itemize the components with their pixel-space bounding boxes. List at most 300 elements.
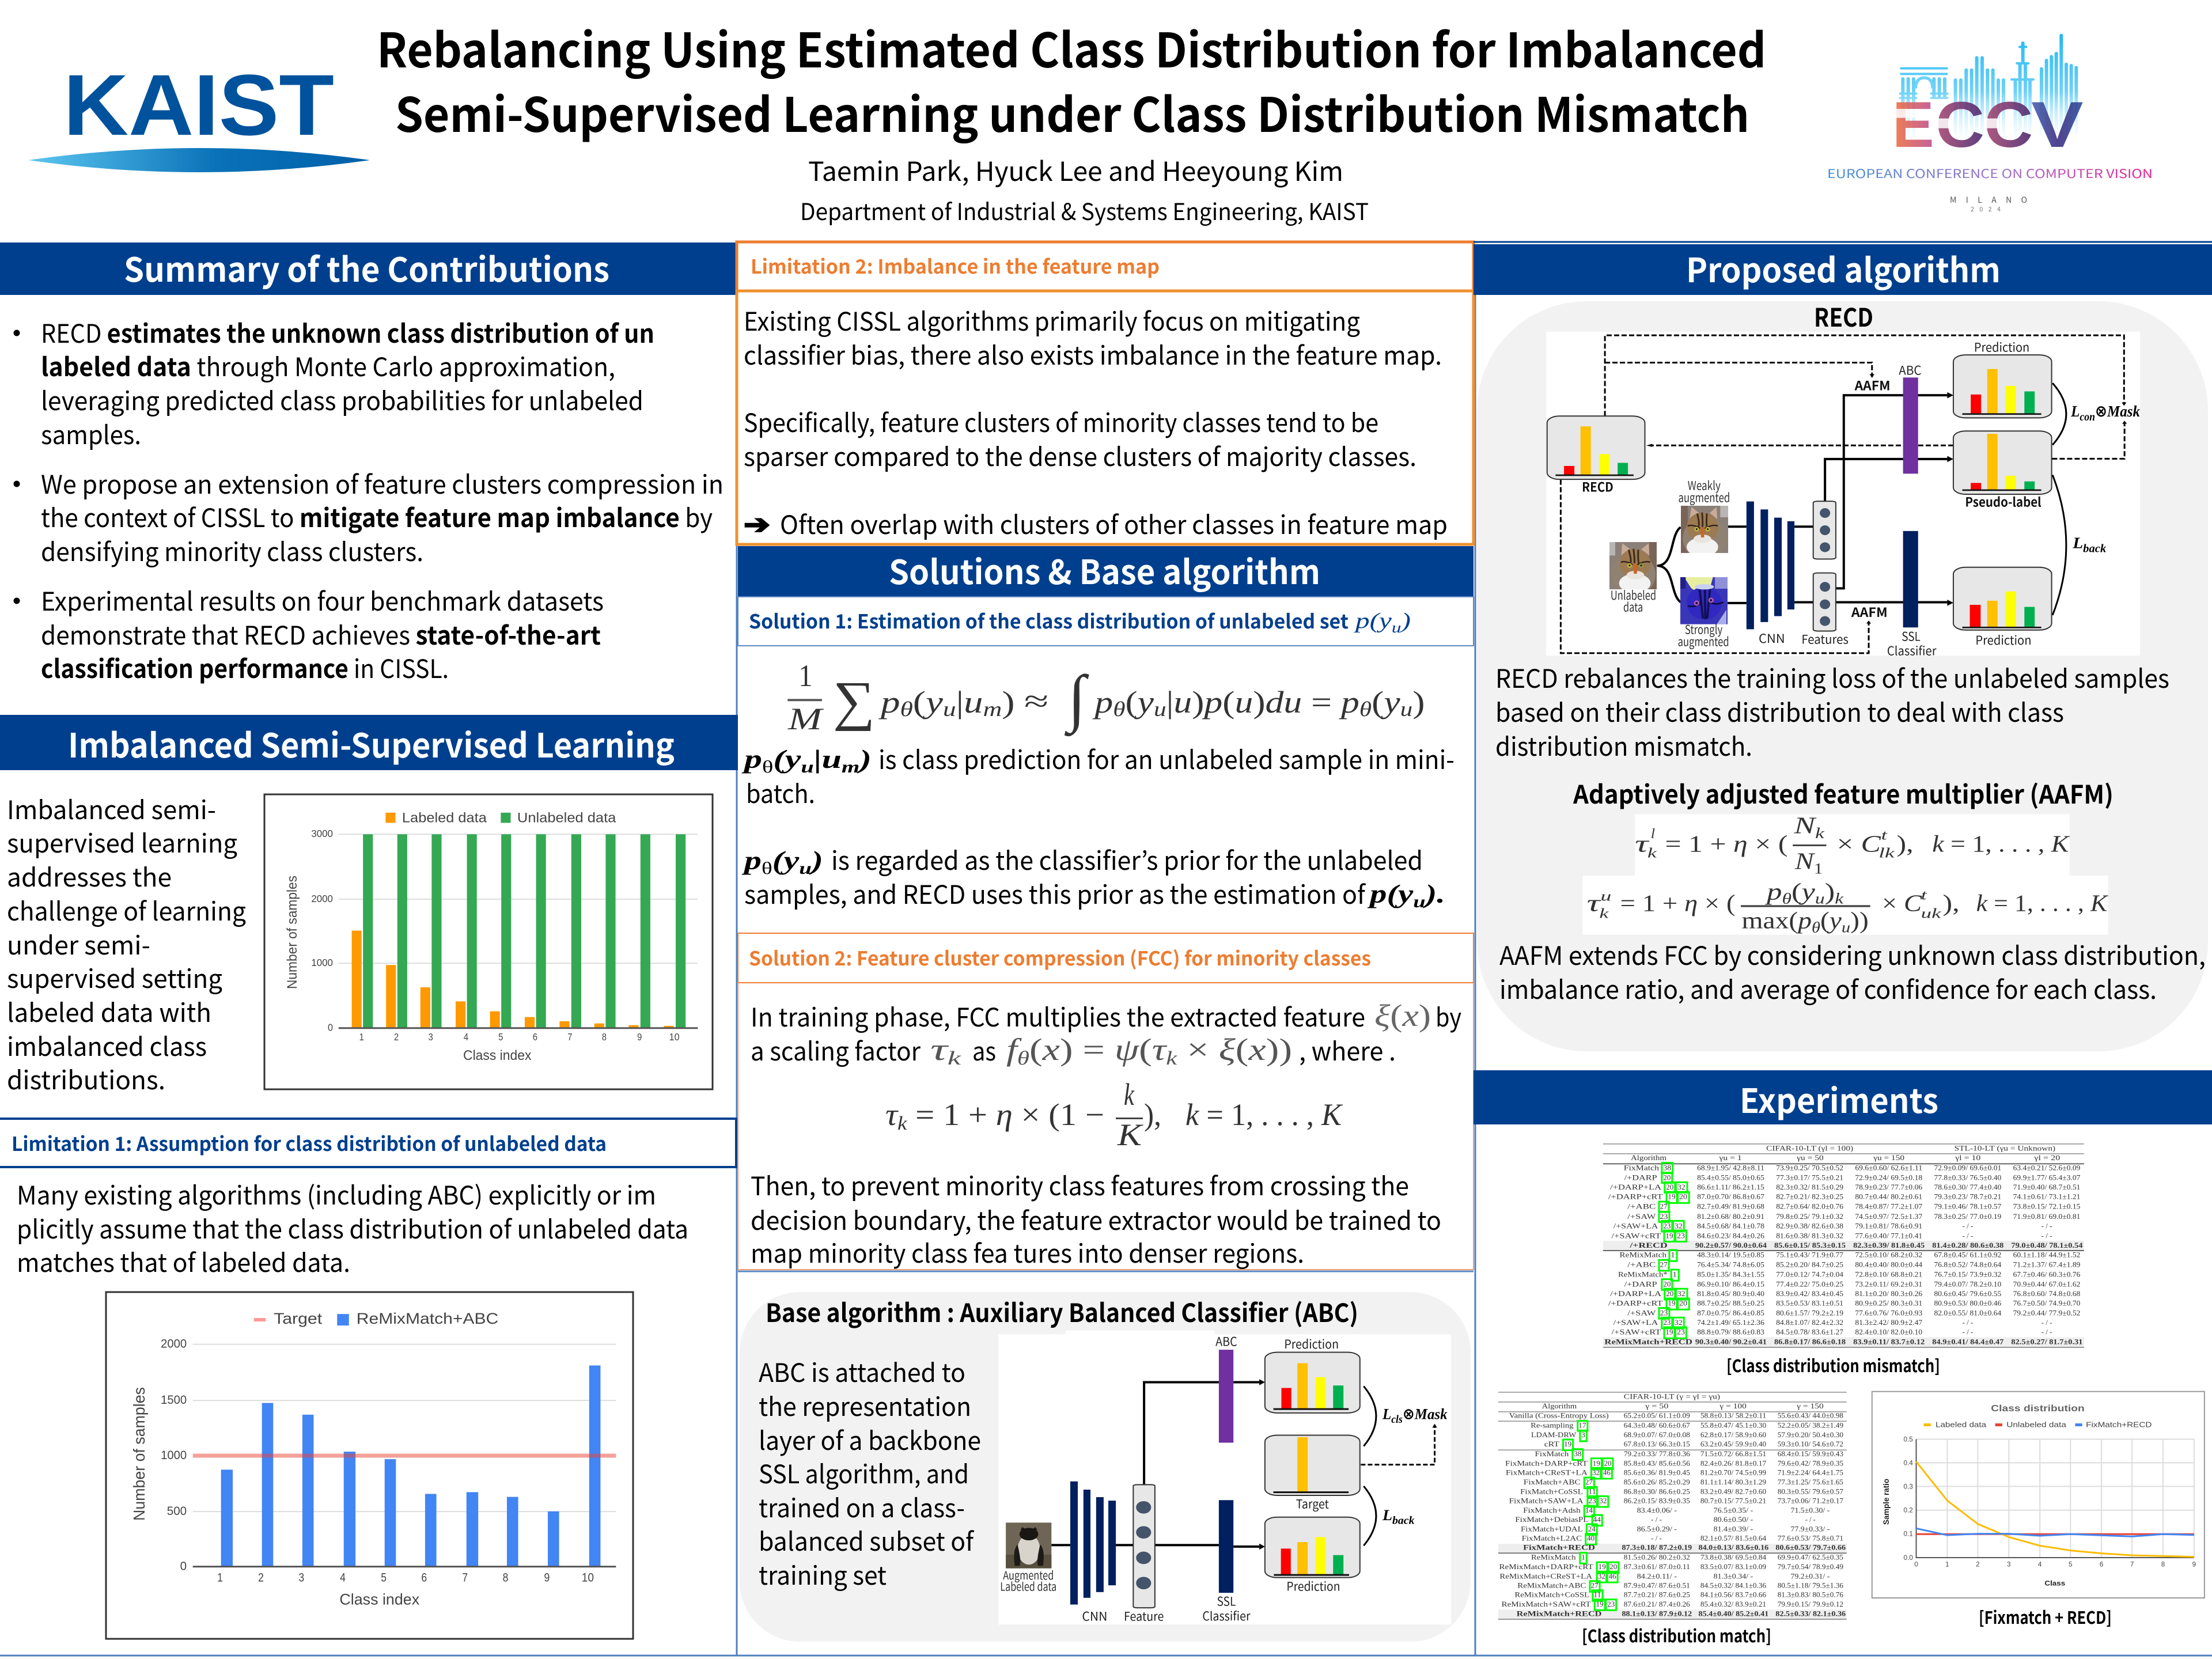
table: class distribution match: LDAM-DRW: [1531, 1431, 1576, 1439]
formula: AAFM multipliers: × C: [1882, 890, 1922, 916]
bar chart: labeled vs unlabeled samples per class: [264, 794, 713, 1089]
table: class distribution mismatch: ReMixMatch*: [1618, 1270, 1668, 1279]
table: class distribution mismatch: 84.8±1.07/ 82.4±2.32: [1776, 1319, 1843, 1327]
panel: experiments: 55.6±0.43/ 44.0±0.98: [1778, 1411, 1843, 1420]
line chart: class distribution: Labeled data: [1936, 1421, 1986, 1429]
table: class distribution mismatch: 77.4±0.22/ 75.0±0.25: [1776, 1280, 1843, 1289]
table: class distribution match: 44: [1593, 1516, 1601, 1524]
table: class distribution match: 83.5±0.07/ 83.1±0.09: [1700, 1563, 1766, 1571]
table: class distribution mismatch: 32: [1675, 1222, 1683, 1230]
SSL classifier: [1903, 531, 1918, 627]
text block: solution 2 explanation: decision boundary, the feature extractor would be trained to: [751, 1200, 1441, 1237]
heading: base algorithm: Base algorithm : Auxiliary Balanced Classifier (ABC): [766, 1293, 1358, 1330]
text block: ABC description: layer of a backbone: [759, 1421, 981, 1457]
table: class distribution mismatch: 19: [1665, 1328, 1673, 1336]
table: class distribution mismatch: - / -: [1963, 1328, 1973, 1336]
line chart: class distribution: 0.0: [1903, 1554, 1913, 1562]
panel: experiments: 80.6±0.53/ 79.7±0.66: [1775, 1543, 1846, 1552]
bar chart: ReMixMatch+ABC class distribution: Class index: [339, 1590, 419, 1608]
text block: solution 1 explanation: u: [801, 757, 814, 777]
formula: Monte Carlo approximation: u)p(u)du = p: [1173, 685, 1374, 719]
bar chart: labeled vs unlabeled samples per class: 1000: [311, 957, 333, 968]
table: class distribution match: 87.3±0.18/ 87.2±0.19: [1622, 1543, 1692, 1552]
table: class distribution match: CIFAR-10-LT (γ = γl = γu): [1624, 1392, 1720, 1401]
logo: ECCV: 2024: [1971, 204, 2001, 214]
table: class distribution mismatch: 20: [1679, 1192, 1687, 1201]
table: class distribution mismatch: 20: [1666, 1183, 1673, 1191]
formula: AAFM multipliers: max(p: [1742, 907, 1849, 934]
line chart: class distribution: 3: [2007, 1560, 2011, 1568]
formula: scaling factor tau: K: [1117, 1118, 1143, 1152]
table: class distribution match: 81.3±0.34/ -: [1714, 1572, 1753, 1581]
text block: first contribution: [14, 313, 654, 452]
bar chart: ReMixMatch+ABC class distribution: 1000: [161, 1448, 187, 1462]
panel: limitation 2: [737, 242, 1474, 544]
prediction box bottom: [1953, 567, 2052, 649]
formula: scaling factor tau: [885, 1077, 1343, 1152]
table: class distribution mismatch: 81.6±0.38/ 81.3±0.32: [1776, 1232, 1843, 1240]
table: class distribution match: FixMatch+SAW+LA: [1509, 1497, 1584, 1505]
table: class distribution mismatch: 79.3±0.23/ 78.7±0.21: [1934, 1192, 2001, 1201]
bar chart: ReMixMatch+ABC class distribution: 10: [582, 1570, 594, 1584]
table: class distribution match: 27: [1585, 1478, 1593, 1486]
table: class distribution match: γ = 100: [1719, 1402, 1747, 1410]
table: class distribution match: 20: [1609, 1563, 1617, 1571]
table: class distribution match: FixMatch+CoSSL: [1520, 1487, 1583, 1496]
table: class distribution match: ReMixMatch: [1531, 1553, 1576, 1562]
table: class distribution match: 19: [1593, 1459, 1600, 1468]
table: class distribution mismatch: 82.0±0.55/ 81.0±0.64: [1934, 1309, 2001, 1317]
formula: AAFM multipliers: k: [1815, 824, 1824, 842]
formula: AAFM multipliers: × C: [1837, 831, 1881, 857]
SSL classifier: [1219, 1500, 1233, 1593]
table: class distribution mismatch: 88.7±0.25/ 88.5±0.25: [1697, 1299, 1764, 1308]
table: class distribution mismatch: 82.7±0.21/ 82.3±0.25: [1776, 1192, 1843, 1201]
table: class distribution mismatch: /+DARP+cRT: [1608, 1192, 1663, 1201]
table: class distribution mismatch: 83.5±0.53/ 83.1±0.51: [1776, 1299, 1843, 1308]
logo: ECCV: E: [1892, 88, 1934, 161]
table: class distribution mismatch: 23: [1660, 1309, 1668, 1317]
table: class distribution mismatch: 88.8±0.79/ 88.6±0.83: [1697, 1328, 1764, 1336]
table: class distribution mismatch: 1: [1671, 1251, 1675, 1259]
logo: KAIST: KAIST: [63, 56, 334, 153]
formula: AAFM multipliers: ),: [1897, 831, 1914, 857]
text block: limitation 1 description: Many existing algorithms (including ABC) explicitly or im: [17, 1175, 656, 1212]
panel: experiments: 82.5±0.33/ 82.1±0.36: [1775, 1609, 1846, 1618]
heading: experiments: Experiments: [1740, 1074, 1938, 1123]
table: class distribution match: γ = 150: [1797, 1402, 1824, 1410]
table: class distribution mismatch: /+SAW: [1627, 1309, 1656, 1317]
bar chart: labeled vs unlabeled samples per class: 0: [328, 1022, 333, 1033]
table: class distribution mismatch: 77.0±0.12/ 74.7±0.04: [1776, 1270, 1843, 1279]
formula: AAFM multipliers: k = 1, . . . , K: [1932, 831, 2070, 857]
panel: experiments: 68.4±0.15/ 59.9±0.43: [1778, 1450, 1843, 1458]
panel: experiments: 57.9±0.20/ 50.4±0.30: [1778, 1431, 1843, 1439]
text block: AAFM description: AAFM extends FCC by considering unknown class distribution,: [1499, 935, 2206, 972]
table: class distribution match: FixMatch: [1535, 1450, 1569, 1458]
formula: Monte Carlo approximation: y: [922, 685, 943, 719]
bar chart: ReMixMatch+ABC class distribution: Number of samples: [130, 1387, 148, 1521]
diagram: RECD architecture: L: [2071, 403, 2089, 420]
table: class distribution mismatch: /+DARP+cRT: [1608, 1299, 1663, 1308]
table: class distribution match: cRT: [1544, 1440, 1559, 1448]
panel: experiments: [1474, 1070, 2212, 1647]
text block: solution 2 explanation: [738, 983, 1474, 1270]
bar chart: labeled vs unlabeled samples per class: 2: [394, 1032, 399, 1043]
panel: experiments: 59.3±0.10/ 54.6±0.72: [1778, 1440, 1843, 1448]
table: class distribution mismatch: Algorithm: [1631, 1154, 1666, 1162]
table: class distribution mismatch: 84.5±0.78/ 83.6±1.27: [1776, 1328, 1843, 1336]
diagram: ABC architecture: ⊗: [1403, 1404, 1415, 1423]
formula: Monte Carlo approximation: M: [787, 702, 824, 736]
text block: RECD description: based on their class distribution to deal with class: [1495, 692, 2064, 729]
prediction box top: [1265, 1335, 1360, 1413]
text block: imbalanced SSL description: Imbalanced semi-: [7, 790, 216, 827]
line chart: class distribution: Class: [2044, 1580, 2065, 1587]
table: class distribution mismatch: 20: [1679, 1299, 1687, 1308]
heading: imbalanced SSL: Imbalanced Semi-Supervised Learning: [68, 719, 675, 767]
table: class distribution match: 19: [1596, 1600, 1604, 1608]
table: class distribution mismatch: 73.9±0.25/ 70.5±0.52: [1776, 1164, 1843, 1172]
diagram: RECD architecture: back: [2083, 542, 2107, 555]
bar chart: labeled vs unlabeled samples per class: Number of samples: [285, 876, 300, 989]
table: class distribution mismatch: 81.8±0.45/ 80.9±0.40: [1697, 1290, 1764, 1298]
table: class distribution mismatch: CIFAR-10-LT (γl = 100): [1766, 1144, 1853, 1153]
table: class distribution match: ReMixMatch+SAW+cRT: [1502, 1600, 1591, 1608]
panel: experiments: 60.1±1.18/ 44.9±1.52: [2013, 1251, 2080, 1259]
formula: AAFM multipliers: τ: [1635, 831, 1650, 857]
diagram: ABC architecture: Labeled data: [1000, 1577, 1056, 1594]
table: class distribution mismatch: 90.2±0.57/ 90.0±0.64: [1695, 1241, 1767, 1249]
CNN layers: [1070, 1482, 1116, 1604]
table: class distribution match: 11: [1594, 1590, 1601, 1599]
logo: ECCV: C: [1936, 88, 1984, 161]
bar chart: labeled vs unlabeled samples per class: 10: [669, 1032, 680, 1043]
heading: solution 1: p(y: [1355, 609, 1384, 633]
table: class distribution match: 23: [1607, 1600, 1615, 1608]
table: class distribution mismatch: 27: [1660, 1202, 1668, 1211]
formula: AAFM multipliers: y: [1827, 907, 1842, 934]
line chart: class distribution: Class distribution: [1991, 1403, 2085, 1414]
panel: summary of the contributions: [0, 243, 736, 685]
text block: limitation 2 description: Existing CISSL algorithms primarily focus on mitigating: [744, 301, 1360, 338]
table: class distribution mismatch: 80.9±0.53/ 80.0±0.46: [1934, 1299, 2001, 1308]
table: class distribution match: FixMatch+CReST+LA: [1506, 1468, 1588, 1477]
table: class distribution mismatch: γl = 10: [1955, 1154, 1980, 1162]
table: class distribution mismatch: 23: [1677, 1232, 1685, 1240]
diagram: ABC architecture: Augmented: [1003, 1566, 1054, 1583]
text block: imbalanced SSL description: [7, 790, 246, 1097]
formula: scaling factor tau: τ: [885, 1097, 899, 1132]
table: class distribution mismatch: 86.6±1.11/ 86.2±1.15: [1697, 1183, 1764, 1191]
table: class distribution mismatch: 82.7±0.49/ 81.9±0.68: [1697, 1202, 1764, 1211]
bar chart: ReMixMatch+ABC class distribution: 1500: [161, 1392, 187, 1407]
table: class distribution match: 87.3±0.61/ 87.0±0.11: [1624, 1563, 1690, 1571]
formula: AAFM multipliers: t: [1921, 887, 1927, 903]
line chart: class distribution: 0: [1914, 1560, 1918, 1568]
text block: ABC description: trained on a class-: [759, 1488, 965, 1525]
text block: imbalanced SSL description: addresses the: [7, 857, 172, 894]
table: class distribution match: 67.8±0.13/ 66.3±0.15: [1624, 1440, 1690, 1448]
table: class distribution mismatch: - / -: [1963, 1319, 1973, 1327]
formula: AAFM multipliers: uk: [1921, 906, 1941, 921]
table: class distribution mismatch: 80.4±0.40/ 80.0±0.44: [1855, 1260, 1922, 1269]
panel: experiments: 80.3±0.55/ 79.6±0.57: [1778, 1487, 1843, 1496]
formula: Monte Carlo approximation: u: [964, 685, 983, 719]
title: [377, 13, 1766, 146]
text block: solution 2 explanation: τ: [930, 1032, 941, 1067]
formula: Monte Carlo approximation: m: [983, 698, 1002, 721]
table: class distribution mismatch: 20: [1663, 1173, 1671, 1182]
bar chart: ReMixMatch+ABC class distribution: 3: [298, 1570, 304, 1584]
affiliation: Department of Industrial & Systems Engineering, KAIST: [800, 194, 1369, 227]
text block: solution 2 explanation: x) = ψ(τ: [1043, 1032, 1163, 1067]
diagram: ABC architecture: back: [1392, 1514, 1415, 1527]
panel: experiments: 69.9±1.77/ 65.4±3.07: [2013, 1173, 2080, 1182]
heading: solution 1: Solution 1: Estimation of the class distribution of unlabeled set: [749, 606, 1349, 634]
bar chart: ReMixMatch+ABC class distribution: [106, 1292, 633, 1639]
table: class distribution match: 87.7±0.21/ 87.6±0.25: [1624, 1590, 1690, 1599]
bar chart: ReMixMatch+ABC class distribution: 0: [180, 1559, 187, 1573]
diagram: RECD architecture: Weakly: [1688, 476, 1721, 494]
heading: experiments: [1474, 1070, 2212, 1124]
image: augmented labeled cat: [1006, 1522, 1051, 1569]
table: class distribution mismatch: 32: [1675, 1319, 1683, 1327]
formula: scaling factor tau: k = 1, . . . , K: [1185, 1097, 1343, 1132]
text block: solution 1 explanation: ): [857, 744, 872, 774]
text block: limitation 2 description: Specifically, feature clusters of minority classes tend to be: [744, 403, 1378, 440]
table: class distribution mismatch: 79.1±0.81/ 78.6±0.91: [1855, 1222, 1922, 1230]
table: class distribution mismatch: 80.6±1.57/ 79.2±2.19: [1776, 1309, 1843, 1317]
bar chart: labeled vs unlabeled samples per class: 7: [567, 1032, 572, 1043]
table: class distribution mismatch: /+DARP: [1624, 1280, 1657, 1289]
table: class distribution mismatch: /+DARP: [1624, 1173, 1657, 1182]
bar chart: ReMixMatch+ABC class distribution: 8: [503, 1570, 508, 1584]
formula: AAFM multipliers: u: [1815, 890, 1825, 907]
formula: Monte Carlo approximation: ∫: [1065, 662, 1089, 737]
formula: AAFM multipliers: y: [1799, 878, 1815, 905]
table: class distribution match: 68.9±0.07/ 67.0±0.08: [1624, 1431, 1690, 1439]
text block: imbalanced SSL description: under semi-: [7, 925, 150, 962]
text block: second contribution: the context of CISSL to mitigate feature map imbalance by: [41, 498, 713, 535]
diagram: ABC architecture: CNN: [1082, 1607, 1107, 1624]
panel: experiments: 79.6±0.42/ 78.9±0.35: [1778, 1459, 1843, 1468]
diagram: RECD architecture: AAFM: [1854, 376, 1891, 394]
line chart: class distribution: Sample ratio: [1881, 1479, 1891, 1525]
table: class distribution mismatch: 76.8±0.52/ 74.8±0.64: [1934, 1260, 2001, 1269]
text block: second contribution: densifying minority class clusters.: [41, 532, 423, 569]
table: class distribution match: ReMixMatch+ABC: [1517, 1581, 1586, 1590]
loss connectors: [2052, 383, 2066, 615]
table: class distribution match: ReMixMatch+CoSSL: [1514, 1590, 1589, 1599]
table: class distribution mismatch: 87.0±0.75/ 86.4±0.85: [1697, 1309, 1764, 1317]
text block: solution 1 explanation: |u: [814, 744, 842, 774]
logo: ECCV: C: [1984, 88, 2033, 161]
bar chart: labeled vs unlabeled samples per class: 1: [359, 1032, 364, 1043]
text block: ABC description: balanced subset of: [759, 1521, 975, 1558]
table: class distribution mismatch: 78.6±0.30/ 77.4±0.40: [1934, 1183, 2001, 1191]
table: class distribution match: 32: [1598, 1572, 1605, 1581]
table: class distribution match: γ = 50: [1645, 1402, 1668, 1410]
formula: Monte Carlo approximation: |: [1166, 685, 1173, 719]
loss connectors: [1363, 1386, 1376, 1546]
table: class distribution mismatch: 87.0±0.70/ 86.8±0.67: [1697, 1192, 1764, 1201]
table: class distribution match: 85.6±0.36/ 81.9±0.45: [1624, 1468, 1690, 1477]
diagram: ABC architecture: cls: [1391, 1414, 1403, 1426]
text block: solution 2 explanation: f: [1006, 1032, 1022, 1067]
formula: Monte Carlo approximation: ∑: [833, 671, 875, 732]
formula: AAFM multipliers: k: [1647, 845, 1657, 861]
text block: limitation 2 description: sparser compared to the dense clusters of majority classes.: [744, 437, 1416, 474]
formula: AAFM multipliers: )): [1850, 907, 1869, 934]
formula: Monte Carlo approximation: (: [913, 685, 926, 719]
table: class distribution match: 81.5±0.26/ 80.2±0.32: [1624, 1553, 1690, 1562]
table: class distribution mismatch: 20: [1666, 1290, 1673, 1298]
line chart: class distribution: 6: [2100, 1560, 2103, 1568]
table: class distribution match: 20: [1604, 1459, 1612, 1468]
table: class distribution match: 71.5±0.30/ -: [1791, 1506, 1830, 1514]
panel: experiments: 82.5±0.27/ 81.7±0.31: [2011, 1338, 2082, 1346]
formula: AAFM multipliers: p: [1764, 878, 1782, 905]
table: class distribution mismatch: γu = 50: [1797, 1154, 1824, 1162]
line chart: class distribution: 0.4: [1903, 1459, 1913, 1467]
diagram: RECD architecture: augmented: [1678, 632, 1729, 650]
table: class distribution match: 14: [1585, 1506, 1593, 1514]
prediction box top: Prediction: [1284, 1335, 1339, 1353]
table: class distribution mismatch: 78.4±0.87/ 77.2±1.07: [1855, 1202, 1922, 1211]
text block: solution 2 explanation: as: [972, 1031, 996, 1068]
table: class distribution mismatch: 19: [1668, 1192, 1676, 1201]
panel: experiments: 73.8±0.15/ 72.1±0.15: [2013, 1202, 2080, 1211]
diagram: RECD architecture: AAFM: [1851, 603, 1888, 621]
table: class distribution match: 63.2±0.45/ 59.9±0.40: [1700, 1440, 1766, 1448]
panel: experiments: 81.3±0.83/ 80.5±0.76: [1778, 1590, 1843, 1599]
panel: experiments: 79.0±0.48/ 78.1±0.54: [2011, 1241, 2082, 1249]
table: class distribution mismatch: 32: [1677, 1183, 1685, 1191]
heading: limitation 1: Limitation 1: Assumption for class distribtion of unlabeled data: [12, 1128, 607, 1157]
heading: solution 1: [738, 597, 1474, 646]
formula: Monte Carlo approximation: (: [1372, 685, 1384, 719]
formula: AAFM multipliers: N: [1794, 812, 1829, 839]
text block: imbalanced SSL description: supervised learning: [7, 823, 237, 860]
table: class distribution match: FixMatch+UDAL: [1521, 1525, 1583, 1533]
table: class distribution match: 76.5±0.35/ -: [1714, 1506, 1753, 1514]
text block: solution 2 explanation: Then, to prevent minority class features from crossing the: [751, 1166, 1409, 1203]
formula: AAFM multipliers: (: [1791, 878, 1802, 905]
text block: first contribution: labeled data through Monte Carlo approximation,: [41, 347, 615, 384]
text block: limitation 1 description: matches that of labeled data.: [17, 1243, 350, 1279]
line chart: class distribution: 0.5: [1903, 1435, 1913, 1443]
target box: Target: [1296, 1495, 1329, 1512]
text block: limitation 2 description: Often overlap with clusters of other classes in feature map: [780, 505, 1448, 541]
table: class distribution mismatch: /+DARP+LA: [1610, 1290, 1661, 1298]
text block: solution 1 explanation: p: [744, 846, 757, 875]
text block: solution 1 explanation: (y: [773, 744, 801, 774]
table: class distribution mismatch: 23: [1663, 1319, 1671, 1327]
table: class distribution match: FixMatch+ABC: [1524, 1478, 1581, 1486]
panel: experiments: 71.9±0.40/ 68.7±0.51: [2013, 1183, 2080, 1191]
table: class distribution mismatch: /+SAW+cRT: [1612, 1328, 1661, 1336]
table: class distribution mismatch: 23: [1660, 1213, 1668, 1221]
bar chart: labeled vs unlabeled samples per class: 4: [464, 1032, 468, 1043]
heading: limitation 2: [737, 242, 1474, 291]
table: class distribution match: FixMatch+DARP+cRT: [1505, 1459, 1588, 1468]
table: class distribution match: 79.2±0.33/ 77.8±0.36: [1624, 1450, 1690, 1458]
table: class distribution mismatch: 1: [1673, 1270, 1677, 1279]
bar chart: ReMixMatch+ABC class distribution: Target: [274, 1309, 322, 1327]
bar chart: labeled vs unlabeled samples per class: 9: [637, 1032, 642, 1043]
formula: Monte Carlo approximation: ): [1412, 685, 1425, 719]
heading: solutions: [738, 546, 1474, 597]
panel: experiments: 79.2±0.44/ 77.9±0.52: [2013, 1309, 2080, 1317]
table: class distribution match: - / -: [1651, 1534, 1662, 1543]
line chart: class distribution: [1872, 1392, 2205, 1598]
formula: AAFM multipliers: lk: [1878, 845, 1895, 861]
table: class distribution mismatch: 80.6±0.45/ 79.6±0.55: [1934, 1290, 2001, 1298]
table: class distribution match: 88.1±0.13/ 87.9±0.12: [1622, 1609, 1692, 1618]
formula: Monte Carlo approximation: θ: [1359, 698, 1372, 721]
table: class distribution match: 27: [1591, 1581, 1599, 1590]
image: unlabeled cat: [1609, 542, 1657, 589]
text block: AAFM description: imbalance ratio, and average of confidence for each class.: [1499, 969, 2157, 1006]
text block: RECD description: [1495, 658, 2169, 763]
table: class distribution match: 46: [1603, 1468, 1611, 1477]
table: class distribution mismatch: 86.9±0.10/ 86.4±0.15: [1697, 1280, 1764, 1289]
panel: base algorithm ABC: [738, 1271, 1474, 1642]
diagram: RECD architecture: L: [2073, 534, 2090, 552]
table: class distribution match: 81.1±1.14/ 80.3±1.29: [1700, 1478, 1766, 1486]
logo: ECCV: MILANO: [1950, 194, 2027, 206]
table: class distribution mismatch: - / -: [1963, 1222, 1973, 1230]
table: class distribution mismatch: 79.4±0.07/ 78.2±0.10: [1934, 1280, 2001, 1289]
table: class distribution match: 58.8±0.13/ 58.2±0.11: [1700, 1411, 1766, 1420]
diagram: RECD architecture: [1546, 332, 2140, 659]
table: class distribution mismatch: 85.0±1.35/ 84.3±1.55: [1697, 1270, 1764, 1279]
table: class distribution match: 87.9±0.47/ 87.6±0.51: [1624, 1581, 1690, 1590]
diagram: RECD architecture: con: [2080, 411, 2095, 423]
line chart: class distribution: 8: [2161, 1560, 2165, 1568]
heading: proposed algorithm: Proposed algorithm: [1686, 244, 2001, 292]
diagram: RECD architecture: ⊗: [2095, 402, 2107, 421]
table: class distribution match: 82.1±0.57/ 81.5±0.64: [1700, 1534, 1766, 1543]
text block: solution 1 explanation: (y: [772, 846, 800, 875]
formula: AAFM multipliers: k: [1835, 890, 1844, 907]
table: class distribution match: 55.8±0.47/ 45.1±0.30: [1700, 1421, 1766, 1430]
table: class distribution match: 46: [1609, 1572, 1616, 1581]
table: class distribution match: 40: [1587, 1534, 1594, 1543]
table: class distribution mismatch: 82.7±0.64/ 82.0±0.76: [1776, 1202, 1843, 1211]
RECD box: RECD: [1582, 477, 1613, 495]
table: class distribution mismatch: /+ABC: [1627, 1260, 1656, 1269]
panel: solutions and base algorithm: [738, 546, 1474, 1642]
text block: solution 2 explanation: by: [1435, 997, 1461, 1034]
table: class distribution mismatch: 78.9±0.23/ 77.7±0.06: [1855, 1183, 1922, 1191]
table: class distribution mismatch: - / -: [2041, 1222, 2052, 1230]
panel: experiments: 69.9±0.47/ 62.5±0.35: [1778, 1553, 1843, 1562]
line chart: class distribution: 7: [2130, 1560, 2134, 1568]
table: class distribution match: 80.7±0.15/ 77.5±0.21: [1700, 1497, 1766, 1505]
text block: RECD description: distribution mismatch.: [1495, 726, 1752, 763]
table: class distribution match: FixMatch+L2AC: [1522, 1534, 1582, 1543]
feature vector: [1133, 1484, 1155, 1608]
panel: proposed algorithm: Mask: [2107, 403, 2173, 420]
table: class distribution match: FixMatch+Adsh: [1523, 1506, 1581, 1514]
table: class distribution mismatch: 74.2±1.49/ 65.1±2.36: [1697, 1319, 1764, 1327]
formula: AAFM multipliers: θ: [1812, 919, 1820, 935]
line chart: class distribution: 5: [2069, 1560, 2073, 1568]
panel: experiments: 70.9±0.44/ 67.0±1.62: [2013, 1280, 2080, 1289]
table: class distribution mismatch: /+DARP+LA: [1610, 1183, 1661, 1191]
